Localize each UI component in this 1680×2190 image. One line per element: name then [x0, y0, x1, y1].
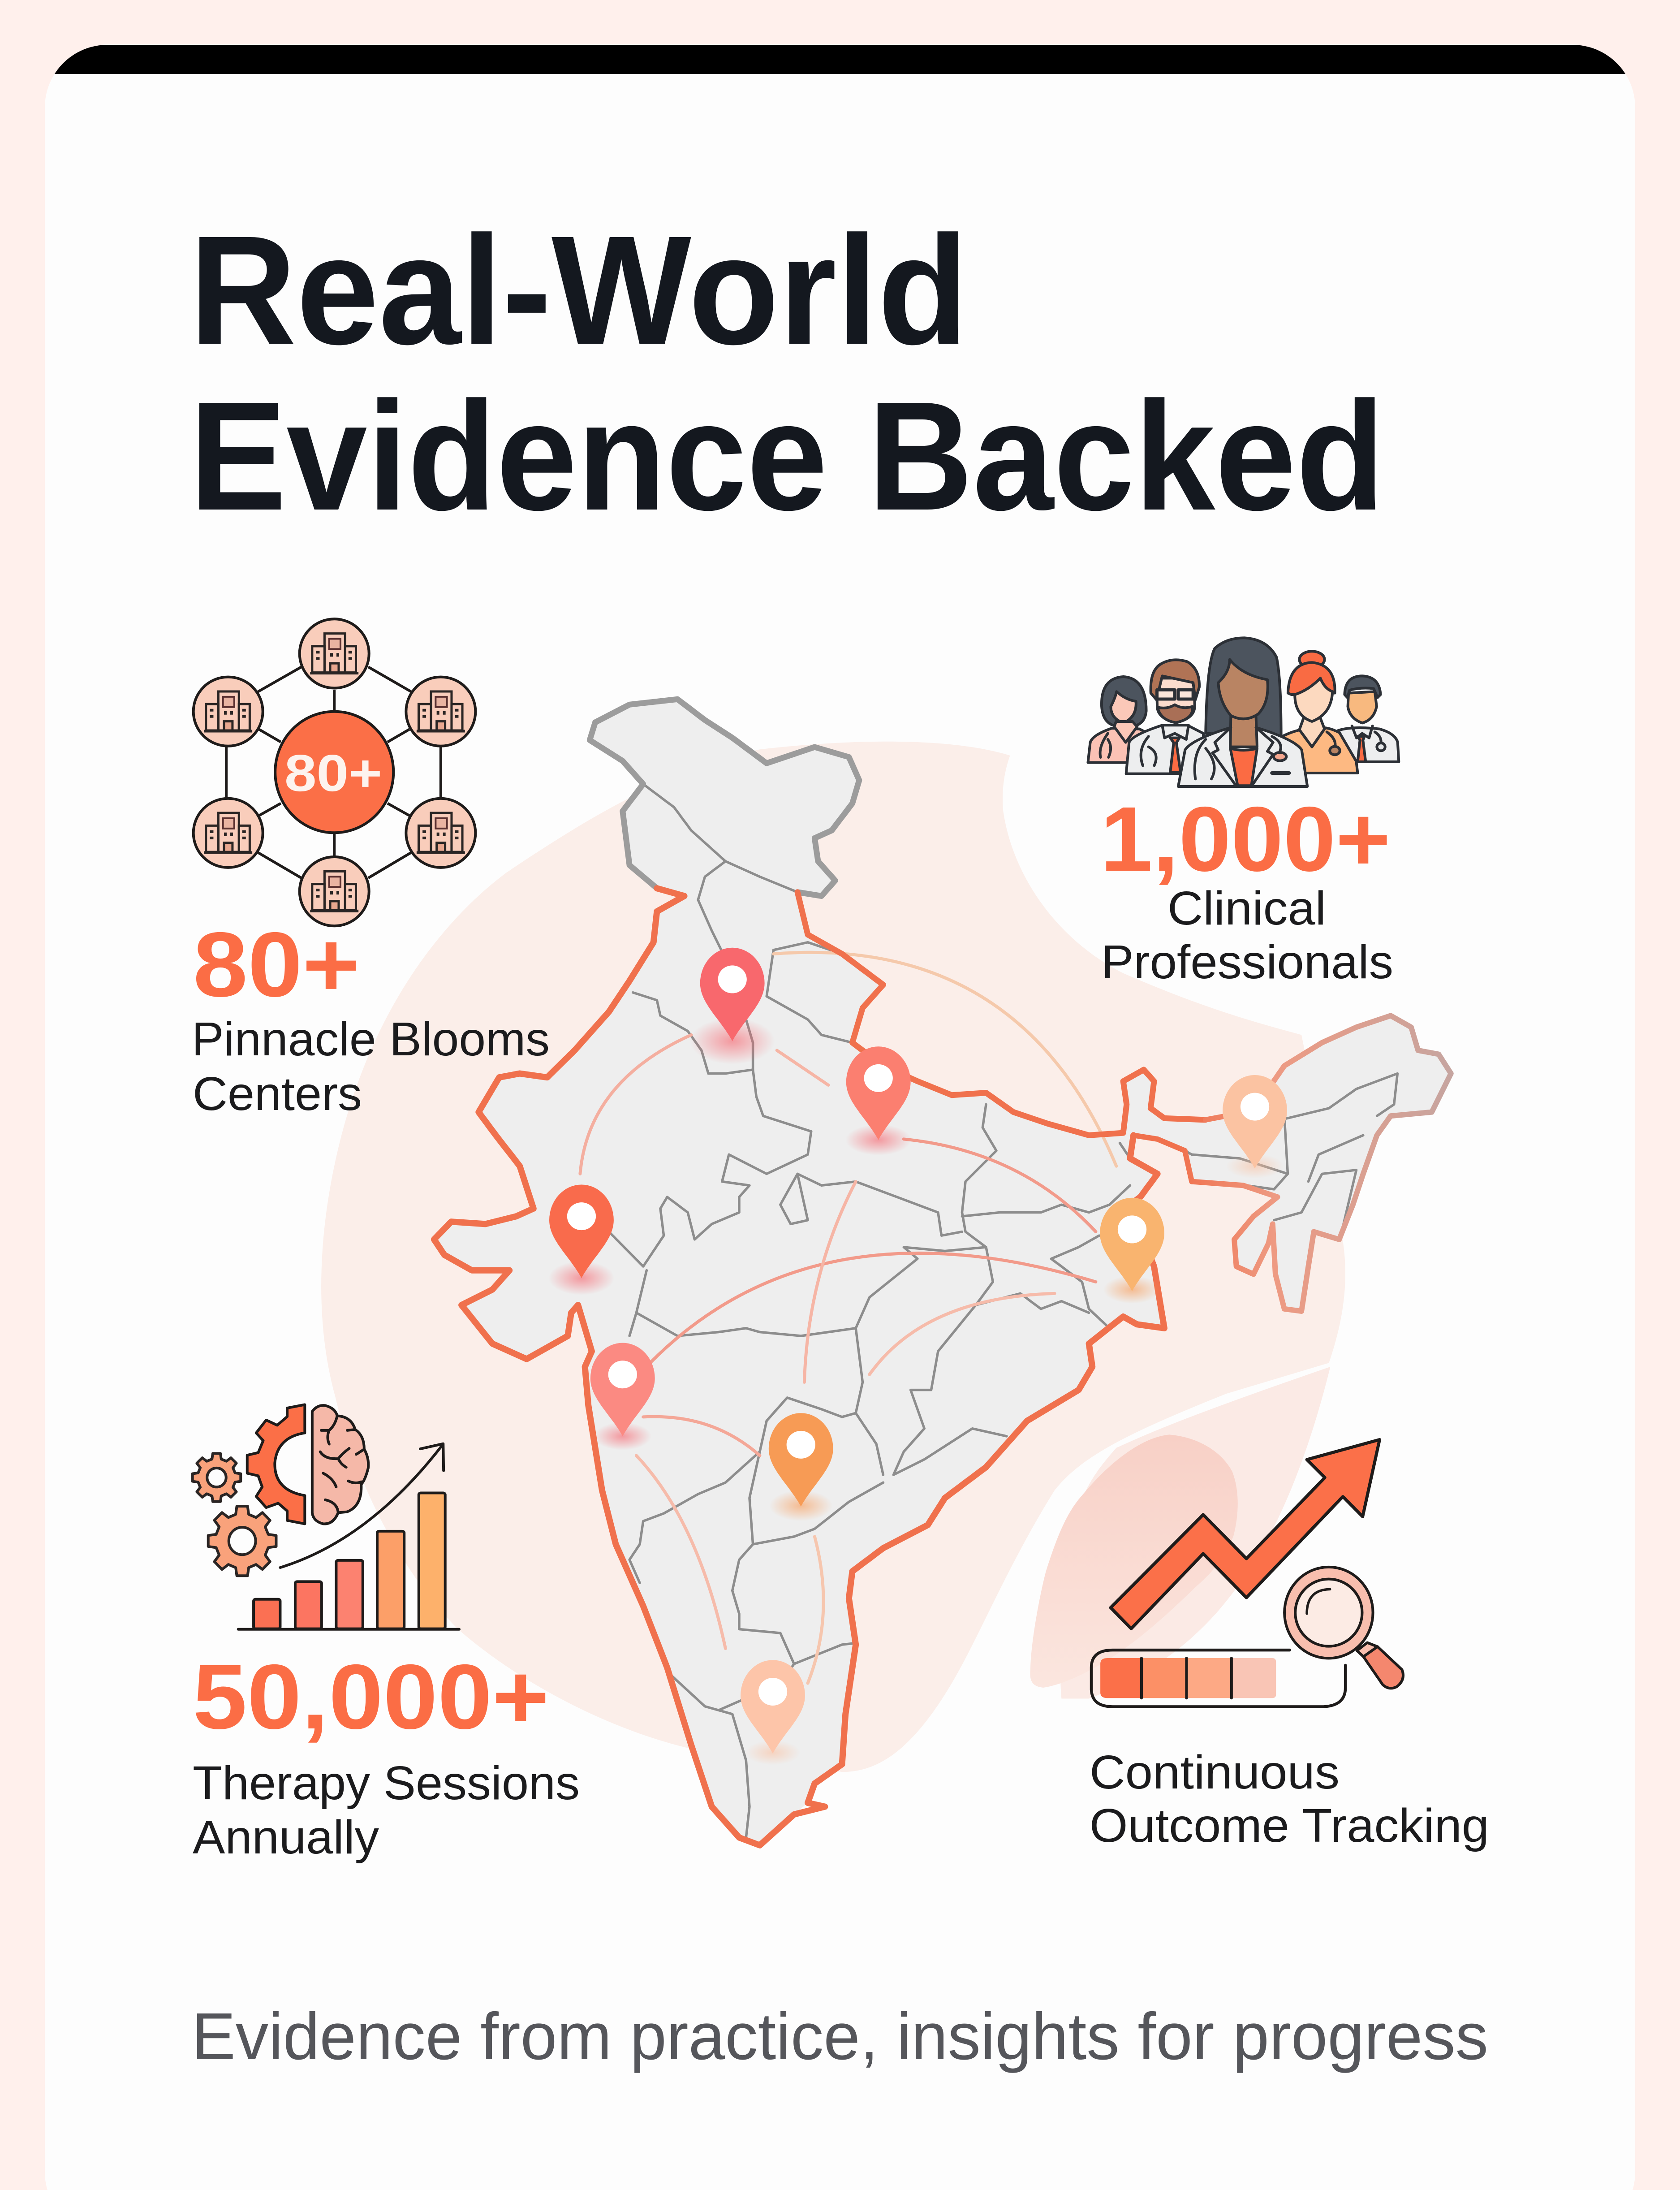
- darker blob behind trend arrow: [1030, 1434, 1238, 1688]
- stat: 80+ centers: [192, 619, 550, 1120]
- stat label: Pinnacle Blooms Centers: [192, 1013, 550, 1120]
- pin: Kolkata: [1100, 1198, 1164, 1291]
- stat: 1,000+ professionals: [1088, 638, 1399, 989]
- stat number: 1,000+: 1,000+: [1100, 788, 1391, 890]
- pin: Hyderabad: [769, 1413, 833, 1507]
- stat: 50,000+ sessions: [193, 1404, 580, 1864]
- stat: continuous outcome tracking: [1090, 1439, 1489, 1852]
- decorative background blobs: [321, 742, 1345, 1772]
- pin: Lucknow: [846, 1046, 911, 1140]
- bearded man: [1126, 660, 1203, 774]
- stat label: Clinical Professionals: Professionals: [1101, 936, 1393, 989]
- small gear: [193, 1453, 241, 1502]
- half gear: [247, 1404, 305, 1524]
- pin glows: [548, 1018, 1284, 1765]
- pin: Mumbai: [590, 1343, 655, 1436]
- map land fill: [434, 699, 1451, 1845]
- map coastline: north grey: [590, 699, 859, 896]
- title: Real-World: [190, 204, 968, 377]
- bars: [254, 1493, 445, 1629]
- pin: Ahmedabad: [549, 1185, 614, 1278]
- pin: Chennai: [741, 1660, 805, 1754]
- map coastline: orange west, south and east: [434, 888, 1164, 1845]
- stat label: Clinical Professionals: [1101, 882, 1393, 989]
- stat label: Pinnacle Blooms Centers: Centers: [193, 1067, 362, 1120]
- map border: north-east frontier with Nepal: [797, 892, 1206, 1135]
- progress bar: [1091, 1650, 1345, 1706]
- magnifier: [1284, 1567, 1403, 1688]
- icon: trend arrow, magnifier and progress bar: [1091, 1439, 1403, 1706]
- growth arrow: [280, 1444, 444, 1568]
- icon: hospital network: [194, 619, 475, 926]
- stat label: Therapy Sessions Annually: Therapy Sessions: [193, 1757, 580, 1810]
- stat number: 50,000+: 50,000+: [193, 1646, 549, 1748]
- icon: brain, gears and growth bars: [193, 1404, 459, 1629]
- stat label: Clinical Professionals: Clinical: [1167, 882, 1326, 935]
- stat label: Therapy Sessions Annually: Annually: [193, 1811, 379, 1864]
- nurse with bun: [1282, 651, 1358, 773]
- lead doctor woman: [1178, 638, 1307, 786]
- connection arcs: [580, 952, 1116, 1683]
- man right: [1338, 676, 1399, 762]
- map border: north-east states: [1133, 1015, 1451, 1311]
- pin: Delhi: [700, 948, 765, 1041]
- brain: [312, 1405, 368, 1524]
- large gear: [208, 1506, 276, 1576]
- state borders: [609, 784, 1397, 1838]
- stat label: Continuous Outcome Tracking: [1090, 1746, 1489, 1852]
- trend arrow: [1111, 1439, 1379, 1628]
- title: Evidence Backed: [190, 370, 1385, 543]
- footer tagline: Evidence from practice, insights for progress: [192, 2000, 1488, 2073]
- woman left: [1088, 677, 1146, 763]
- stat label: Continuous Outcome Tracking: Outcome Tracking: [1090, 1799, 1489, 1852]
- title: [190, 204, 1385, 543]
- stat number: 80+: 80+: [193, 913, 360, 1016]
- map of India: [434, 699, 1451, 1845]
- icon: clinical team: [1088, 638, 1399, 786]
- pin: Guwahati: [1223, 1075, 1287, 1168]
- icon label: 80+: 80+: [284, 744, 382, 802]
- stat label: Continuous Outcome Tracking: Continuous: [1090, 1746, 1340, 1799]
- stat label: Pinnacle Blooms Centers: Pinnacle Blooms: [192, 1013, 550, 1066]
- stat label: Therapy Sessions Annually: [193, 1757, 580, 1864]
